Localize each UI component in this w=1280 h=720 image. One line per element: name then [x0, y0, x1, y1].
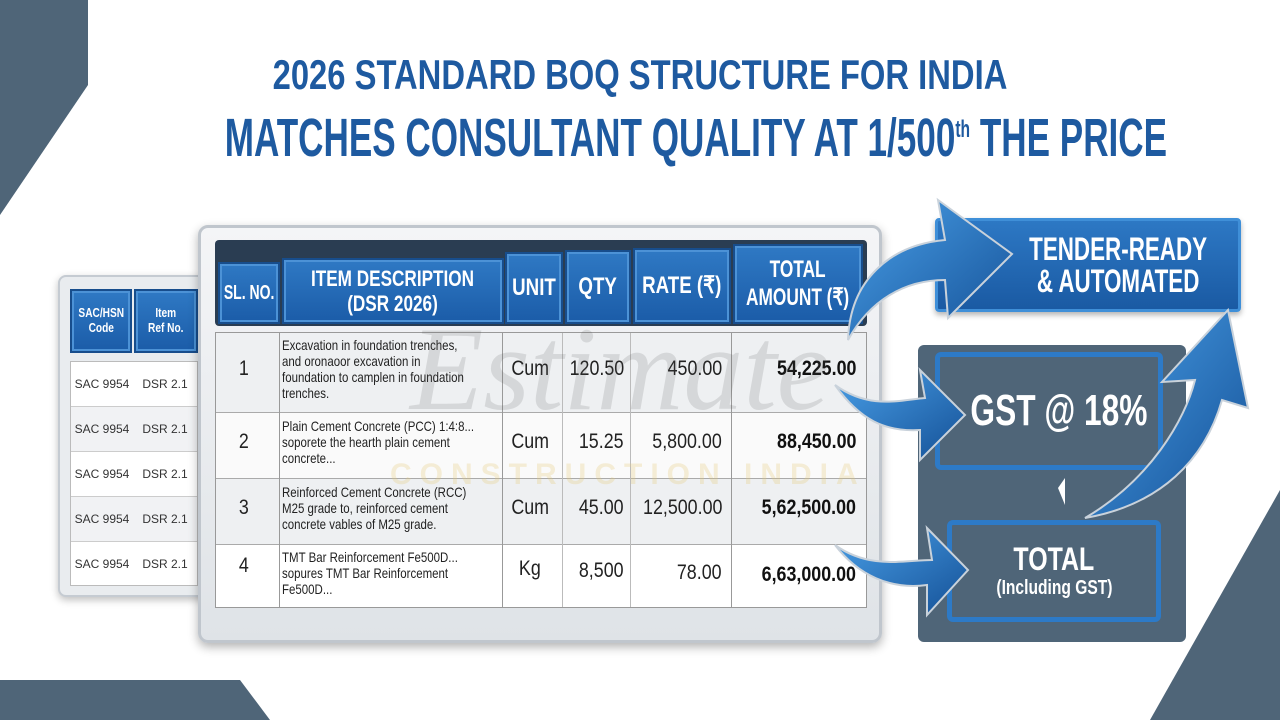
row 2 — [239, 418, 856, 466]
row 3: 3 — [239, 496, 249, 519]
table header: TOTAL — [770, 256, 826, 283]
row 2: Plain Cement Concrete (PCC) 1:4:8... — [282, 418, 474, 434]
row 3: M25 grade to, reinforced cement — [282, 500, 448, 516]
table rows text — [239, 337, 856, 597]
row 2: soporete the hearth plain cement — [282, 434, 450, 450]
icon: small pointer — [1058, 478, 1065, 505]
arrow: to total — [835, 528, 968, 615]
watermark: CONSTRUCTION INDIA — [390, 458, 866, 491]
table body — [215, 332, 867, 608]
title: 2026 STANDARD BOQ STRUCTURE FOR INDIA — [273, 51, 1007, 98]
panel: back table: Code — [88, 320, 114, 335]
arrow: to GST — [835, 370, 965, 460]
row 1 — [239, 337, 856, 401]
row 1: 54,225.00 — [777, 357, 856, 380]
row 1: 120.50 — [569, 357, 624, 380]
row 1: foundation to camplen in foundation — [282, 369, 464, 385]
row 3: concrete vables of M25 grade. — [282, 516, 436, 532]
panel: right slate — [918, 345, 1186, 642]
callout: tender-ready: & AUTOMATED — [1037, 263, 1199, 299]
row 1: 450.00 — [667, 357, 722, 380]
callout: tender-ready: TENDER-READY — [1029, 231, 1207, 267]
watermark: Estimate — [410, 302, 830, 435]
row 3: 45.00 — [579, 496, 624, 519]
row 4: 6,63,000.00 — [762, 563, 856, 586]
row 2: 5,800.00 — [653, 430, 722, 453]
arrow: to tender — [848, 200, 1012, 340]
table header: UNIT — [512, 274, 556, 301]
panel: back table: SAC 9954 — [75, 512, 129, 526]
panel: back table — [58, 275, 208, 597]
row 4: Kg — [519, 557, 541, 580]
row 4: sopures TMT Bar Reinforcement — [282, 565, 448, 581]
table header: ITEM DESCRIPTION — [311, 266, 475, 291]
row 4: 8,500 — [579, 559, 624, 582]
table header: AMOUNT (₹) — [746, 284, 850, 311]
arrow: up to tender — [1085, 310, 1248, 518]
row 1: Cum — [511, 357, 549, 380]
table header — [215, 240, 867, 326]
panel: back table: SAC 9954 — [75, 467, 129, 481]
row 4: TMT Bar Reinforcement Fe500D... — [282, 549, 458, 565]
row 2: 2 — [239, 430, 249, 453]
row 1: trenches. — [282, 385, 329, 401]
row 1: Excavation in foundation trenches, — [282, 337, 458, 353]
row 1: and oronaoor excavation in — [282, 353, 421, 369]
row 3: 5,62,500.00 — [762, 496, 856, 519]
callout: GST: GST @ 18% — [970, 386, 1148, 435]
callout: tender-ready — [935, 218, 1241, 312]
callout: total — [947, 520, 1161, 622]
row 3 — [239, 484, 856, 532]
row 4: 78.00 — [677, 561, 722, 584]
title: MATCHES CONSULTANT QUALITY AT 1/500th THE PRICE — [225, 108, 1167, 168]
table header: QTY — [579, 273, 617, 300]
panel: back table: SAC 9954 — [75, 377, 129, 391]
panel: back table: DSR 2.1 — [142, 467, 188, 481]
row 2: concrete... — [282, 450, 336, 466]
table header: RATE (₹) — [642, 272, 722, 299]
row 3: 12,500.00 — [643, 496, 722, 519]
panel: back table: SAC/HSN — [78, 305, 124, 320]
panel: back table: DSR 2.1 — [142, 557, 188, 571]
panel: main BOQ table — [198, 225, 882, 643]
panel: back table: DSR 2.1 — [142, 422, 188, 436]
panel: back table: DSR 2.1 — [142, 377, 188, 391]
row 4 — [239, 549, 856, 597]
watermark — [390, 302, 866, 491]
callout: GST — [935, 352, 1163, 470]
callout: total: (Including GST) — [996, 577, 1112, 599]
table header: (DSR 2026) — [348, 291, 438, 316]
panel: back table: Ref No. — [148, 320, 184, 335]
row 3: Reinforced Cement Concrete (RCC) — [282, 484, 466, 500]
panel: back table: SAC 9954 — [75, 422, 129, 436]
row 2: Cum — [511, 430, 549, 453]
callout: total: TOTAL — [1014, 541, 1094, 577]
table header: SL. NO. — [224, 282, 274, 304]
row 2: 88,450.00 — [777, 430, 856, 453]
row 4: 4 — [239, 554, 249, 577]
panel: back table: DSR 2.1 — [142, 512, 188, 526]
panel: back table: SAC 9954 — [75, 557, 129, 571]
row 2: 15.25 — [579, 430, 624, 453]
title — [225, 51, 1167, 168]
row 3: Cum — [511, 496, 549, 519]
panel: back table: Item — [156, 305, 176, 320]
row 1: 1 — [239, 357, 249, 380]
row 4: Fe500D... — [282, 581, 332, 597]
